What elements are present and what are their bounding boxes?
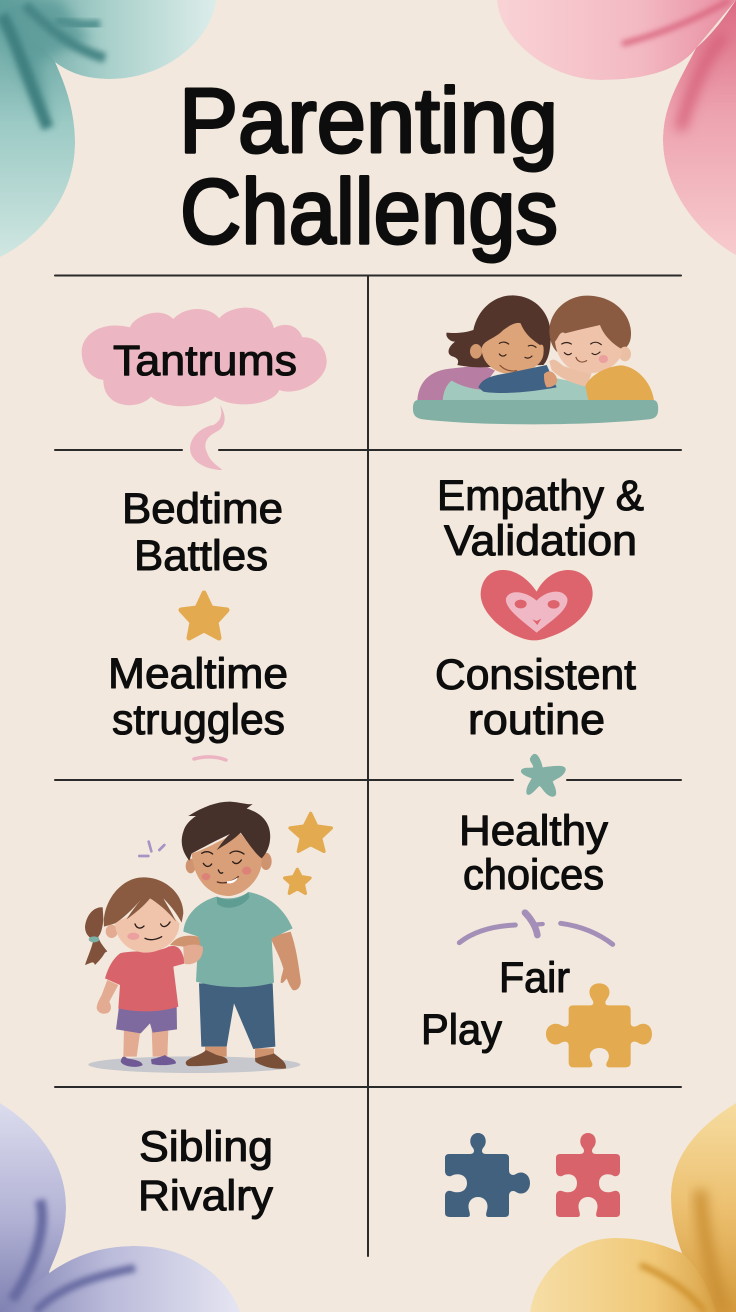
girl hand	[544, 371, 557, 387]
label: Healthy choices: Healthy	[459, 807, 609, 855]
label: Sibling Rivalry	[138, 1123, 274, 1220]
boy head	[192, 833, 262, 896]
boy right arm	[270, 932, 301, 990]
label: Sibling Rivalry: Sibling	[139, 1123, 273, 1171]
girl face	[482, 323, 544, 374]
title	[179, 70, 558, 263]
girl left arm	[97, 980, 118, 1014]
watercolor corner: lavender	[0, 1103, 240, 1312]
boy ear	[619, 347, 631, 361]
girl ponytail	[85, 907, 107, 965]
purple pillow	[417, 365, 495, 401]
inner eyes	[515, 600, 527, 608]
icon: purple arcs and mark	[459, 913, 613, 944]
label: Sibling Rivalry: Rivalry	[138, 1172, 274, 1220]
girl legs	[123, 1028, 168, 1057]
girl hair	[446, 295, 551, 367]
girl ear	[106, 925, 118, 938]
inner pink face	[506, 592, 567, 633]
boy hair	[182, 802, 270, 861]
watercolor corner: teal	[0, 0, 216, 257]
mattress	[413, 400, 658, 424]
boy arm	[549, 360, 592, 387]
label: Empathy and Validation	[437, 472, 644, 565]
label: Consistent routine: routine	[468, 696, 605, 744]
label: Consistent routine	[435, 651, 636, 744]
icon: blue puzzle piece	[445, 1133, 530, 1217]
label: Healthy choices: choices	[463, 851, 604, 899]
label: Empathy and Validation: Validation	[444, 517, 637, 565]
icon: yellow puzzle piece	[546, 983, 652, 1067]
label: Fair Play: Play	[421, 1006, 502, 1054]
boy forearm over girl	[170, 936, 201, 947]
icon: yellow star	[181, 593, 227, 638]
teal blanket	[443, 378, 592, 401]
girl eyes and mouth	[499, 342, 536, 371]
boy shirt	[183, 892, 293, 987]
illustration: two children cuddling	[413, 295, 658, 424]
girl hair	[104, 877, 183, 927]
label: Mealtime struggles: Mealtime	[108, 650, 288, 698]
boy ears	[186, 859, 196, 873]
boy cheek	[599, 355, 608, 363]
decoration: small pink arc	[194, 757, 226, 760]
blue sleeve	[478, 365, 557, 393]
icon: teal star	[521, 754, 566, 797]
girl shoes	[121, 1055, 176, 1067]
panel: tantrums cloud	[82, 308, 327, 470]
boy eyes and mouth	[562, 342, 601, 362]
boy eyes and smile	[202, 851, 244, 883]
label: Mealtime struggles: struggles	[112, 696, 285, 744]
label: Fair Play: Fair	[499, 954, 570, 1002]
inner nose	[532, 619, 541, 625]
girl shorts	[116, 1007, 177, 1033]
boy pants	[199, 983, 275, 1049]
label: Empathy and Validation: Empathy &	[437, 472, 644, 520]
boy smile teeth	[227, 877, 238, 883]
girl cheek	[127, 933, 139, 940]
ground shadow	[88, 1056, 300, 1073]
outer heart	[481, 570, 593, 640]
girl hand	[183, 945, 203, 964]
label: Bedtime Battles	[122, 485, 283, 580]
label: Consistent routine: Consistent	[435, 651, 636, 699]
girl hair tie	[89, 936, 99, 942]
boy feet skin	[205, 1047, 274, 1059]
title: Parenting	[179, 70, 558, 172]
girl head	[115, 898, 179, 953]
gold stars	[285, 813, 331, 893]
label: Fair Play	[421, 954, 570, 1054]
icon: heart	[481, 570, 593, 640]
girl ear	[470, 344, 482, 359]
girl shirt	[105, 946, 185, 1011]
illustration: older brother and little sister	[85, 802, 331, 1073]
label: Bedtime Battles: Battles	[134, 532, 268, 580]
icon: cloud wisp	[190, 405, 225, 470]
boy collar	[217, 892, 249, 908]
label: Bedtime Battles: Bedtime	[122, 485, 283, 533]
yellow shirt	[585, 365, 654, 401]
boy face	[555, 325, 623, 373]
label: Healthy choices	[459, 807, 609, 899]
label: Tantrums: Tantrums	[113, 337, 297, 385]
icon: pink thought cloud	[82, 308, 327, 406]
boy cheeks	[202, 873, 210, 880]
icon: red puzzle piece	[556, 1133, 620, 1217]
boy shoes	[186, 1050, 286, 1069]
label: Mealtime struggles	[108, 650, 288, 744]
girl eyes and smile	[135, 922, 170, 940]
purple sparkle marks	[139, 842, 164, 856]
grid lines	[55, 276, 681, 1256]
watercolor corner: pink	[497, 0, 736, 255]
boy hair	[549, 296, 631, 352]
watercolor corner: yellow	[530, 1103, 736, 1312]
title: Challengs	[180, 161, 558, 263]
